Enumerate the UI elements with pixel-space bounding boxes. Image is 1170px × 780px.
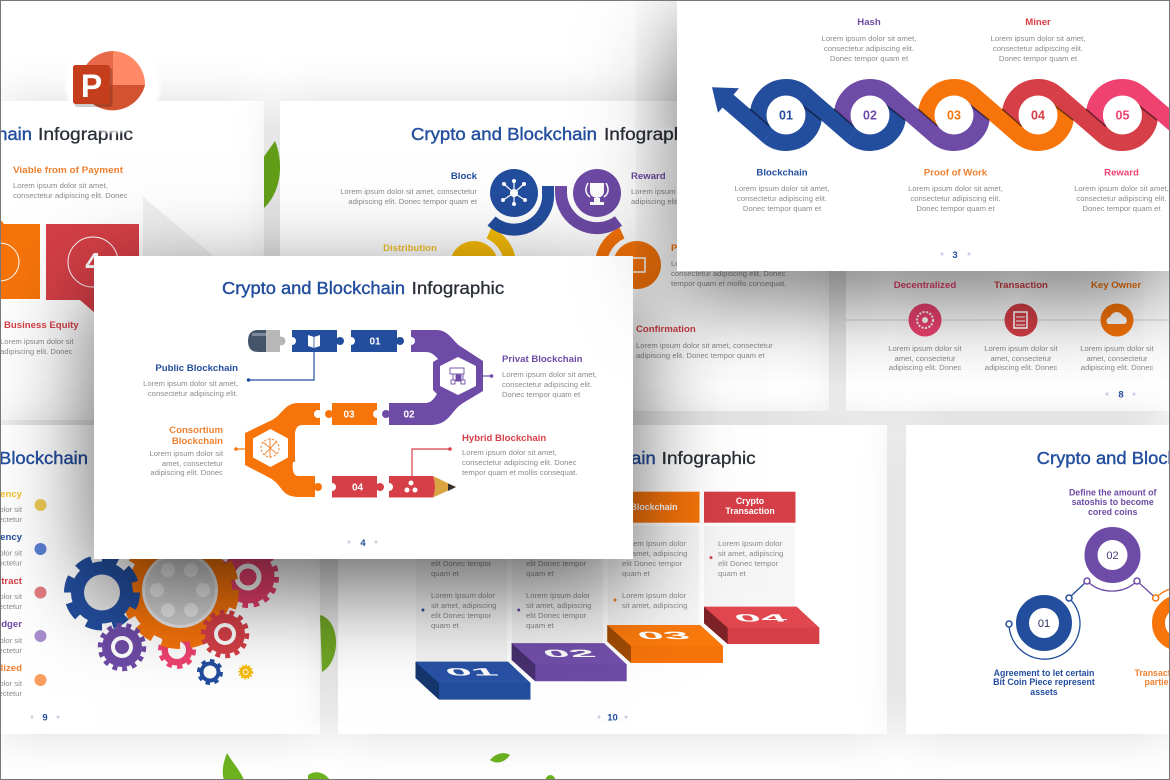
number circles: 05	[1116, 108, 1129, 122]
text block: proof of work: consectetur adipiscing elit.	[910, 194, 1001, 203]
list item: ledger	[0, 619, 46, 655]
list item: currency blue	[0, 532, 46, 568]
text block: hash: Lorem ipsum dolor sit amet,	[822, 34, 916, 43]
column 4 text: sit amet, adipiscing	[718, 549, 783, 558]
gear: red	[203, 612, 247, 656]
text block: business equity: adipiscing elit. Donec	[0, 347, 73, 356]
item: key owner: amet, consectetur	[1086, 354, 1148, 363]
puzzle piece: 04: 04	[352, 482, 363, 494]
page number	[348, 538, 378, 549]
heading	[0, 448, 187, 468]
puzzle piece: 01	[347, 330, 404, 352]
text block: proof	[671, 243, 786, 288]
column 2 text	[517, 559, 591, 630]
puzzle piece: book icon	[288, 330, 344, 352]
callout: consortium stub	[234, 447, 245, 451]
text block: proof: tempor quam et mollis consequat.	[671, 279, 786, 288]
column 1 text: sit amet, adipiscing	[431, 601, 496, 610]
heading	[222, 278, 504, 298]
text block: miner	[991, 17, 1085, 63]
column 3 text: Lorem Ipsum dolor	[622, 591, 687, 600]
page number	[30, 712, 60, 724]
puzzle piece: purple hex privat: 02	[403, 410, 415, 420]
column 1 text	[422, 559, 496, 630]
item: decentralized: Lorem ipsum dolor sit	[888, 344, 963, 353]
heading: Crypto and Blockchain	[472, 448, 656, 468]
icon: consortium network	[261, 438, 279, 458]
text block: confirmation: Lorem ipsum dolor sit amet, consectetur	[636, 341, 773, 350]
list item: currency yellow	[0, 489, 46, 524]
column 4 text: Lorem Ipsum dolor	[718, 539, 783, 548]
number circles: 03	[947, 108, 961, 122]
number circles	[766, 96, 1142, 134]
list item: contract	[0, 576, 46, 611]
text: agreement: Agreement to let certain	[994, 668, 1094, 678]
column 4 text: quam et	[718, 569, 747, 578]
page number	[940, 250, 970, 261]
text block: consortium blockchain: adipiscing elit. Donec	[150, 468, 223, 477]
gear: pink right	[220, 548, 276, 606]
text block: consortium blockchain: Blockchain	[172, 436, 223, 447]
gear: large orange	[126, 536, 234, 644]
ring chain	[489, 186, 622, 262]
item: key owner: Key Owner	[1091, 280, 1141, 291]
step 03	[607, 625, 723, 663]
item: transaction	[984, 280, 1059, 372]
text block: reward: Reward	[1104, 168, 1139, 178]
text block: reward: adipiscing elit. Donec tempor quam et	[631, 197, 760, 206]
heading	[472, 448, 756, 468]
puzzle piece: purple hex privat	[382, 330, 483, 425]
page number	[598, 712, 628, 724]
text block: hybrid blockchain: Lorem ipsum dolor sit amet,	[462, 448, 557, 457]
gear: large blue	[68, 559, 136, 626]
text block: miner: consectetur adipiscing elit.	[993, 44, 1083, 53]
step 02: 02	[540, 648, 599, 659]
text block: miner: Lorem ipsum dolor sit amet,	[991, 34, 1085, 43]
text: define amount: cored coins	[1088, 507, 1137, 517]
gear: small blue	[198, 660, 222, 684]
column 3 text	[614, 539, 687, 610]
heading	[411, 124, 698, 144]
column 2 text: quam et	[526, 569, 555, 578]
column 3 text: quam et	[622, 569, 651, 578]
tile: red 4	[46, 224, 139, 313]
item: key owner: adipiscing elit. Donec	[1081, 363, 1153, 372]
text block: privat blockchain	[502, 354, 597, 399]
column 3 text: sit amet, adipiscing	[622, 601, 687, 610]
text block: reward: Donec tempor quam et	[1082, 204, 1161, 213]
page number: 3	[952, 250, 958, 261]
text block: block	[340, 171, 478, 206]
text block: consortium blockchain: Lorem ipsum dolor sit	[150, 449, 224, 458]
text block: business equity: Business Equity	[4, 320, 79, 331]
heading: Infographic	[604, 124, 698, 144]
callout: public blockchain line	[247, 352, 314, 382]
item: decentralized: amet, consectetur	[894, 354, 956, 363]
icon: PowerPoint logo: P	[81, 68, 102, 104]
page number: 9	[42, 712, 48, 724]
ring 03	[1158, 602, 1170, 644]
puzzle piece: orange hex consortium	[245, 403, 322, 497]
ribbon arrow	[725, 87, 1170, 146]
ring 01: 01	[1038, 618, 1050, 630]
text block: proof of work: Donec tempor quam et	[916, 204, 995, 213]
pencil tip	[433, 476, 456, 498]
text block: hybrid blockchain: tempor quam et mollis consequat.	[462, 468, 577, 477]
gear: small yellow	[239, 666, 252, 678]
panel: slide with circular process	[280, 101, 829, 411]
text block: privat blockchain: Privat Blockchain	[502, 354, 583, 365]
list item: decentralized	[0, 663, 46, 698]
text block: blockchain	[735, 168, 829, 213]
step 04: 04	[731, 612, 791, 624]
text block: block: Block	[451, 171, 478, 182]
panel: slide with business equity	[0, 101, 264, 420]
text: define amount: satoshis to become	[1072, 497, 1154, 507]
panel: slide 9 gears	[0, 425, 320, 734]
item: decentralized: Decentralized	[894, 280, 956, 291]
step 01: 01	[442, 666, 501, 678]
panel: slide with numbered rings	[906, 425, 1170, 734]
column 1 text: elit Donec tempor	[431, 611, 492, 620]
panel: slide 10 steps	[338, 425, 887, 734]
text block: business equity	[0, 320, 79, 356]
page number: 10	[607, 712, 618, 724]
step 01	[416, 662, 530, 700]
arrow head	[712, 87, 739, 113]
icon: yellow circle	[450, 241, 498, 289]
page number: 8	[1118, 390, 1124, 400]
text block: blockchain: Donec tempor quam et	[743, 204, 822, 213]
column 4 header	[704, 492, 796, 523]
heading: Infographic	[662, 448, 756, 468]
number circles: 01	[779, 108, 793, 122]
icon: PowerPoint logo	[67, 51, 159, 134]
text block: privat blockchain: consectetur adipiscing elit.	[502, 380, 592, 389]
step 02	[512, 643, 627, 681]
item: decentralized: adipiscing elit. Donec	[889, 363, 961, 372]
pencil eraser	[248, 330, 286, 352]
text block: business equity: Lorem ipsum dolor sit	[0, 337, 74, 346]
heading: Crypto and Blockchain	[222, 278, 405, 298]
item: transaction: adipiscing elit. Donec	[985, 363, 1057, 372]
text block: proof of work: Lorem ipsum dolor sit amet,	[908, 184, 1003, 193]
text block: hash: Hash	[857, 17, 881, 28]
icon: network circle	[490, 169, 538, 217]
text block: privat blockchain: Donec tempor quam et	[502, 390, 581, 399]
panel: slide 4 puzzle pencil	[94, 256, 633, 559]
heading: Crypto and Blockchain	[411, 124, 597, 144]
item: key owner: Lorem ipsum dolor sit	[1080, 344, 1155, 353]
connector lines	[1006, 578, 1170, 659]
text block: consortium blockchain	[150, 425, 224, 477]
item: transaction: Lorem ipsum dolor sit	[984, 344, 1059, 353]
text block: consortium blockchain: Consortium	[169, 425, 223, 436]
column 4 header: Crypto	[736, 496, 765, 506]
panel: slide 3 ribbon	[677, 0, 1170, 271]
item: decentralized	[888, 280, 963, 372]
column 2 text: Lorem Ipsum dolor	[526, 591, 591, 600]
puzzle piece: 03	[325, 403, 381, 425]
text block: miner: Miner	[1025, 17, 1051, 28]
ring 02	[1091, 534, 1134, 576]
timeline line	[846, 319, 1170, 321]
text block: reward: Lorem ipsum dolor sit amet,	[1074, 184, 1169, 193]
column 2 text: sit amet, adipiscing	[526, 601, 591, 610]
text block: block: Lorem ipsum dolor sit amet, consectetur	[340, 187, 477, 196]
text block: privat blockchain: Lorem ipsum dolor sit amet,	[502, 370, 597, 379]
ring 01	[1022, 602, 1066, 644]
tile: red 4: 4	[85, 247, 101, 278]
label: distribution: Distribution	[383, 243, 437, 254]
page number	[1106, 390, 1136, 400]
column 1 text: Lorem Ipsum dolor	[431, 591, 496, 600]
column 4 text: elit Donec tempor	[718, 559, 779, 568]
text block: viable from of payment: consectetur adipiscing elit. Donec	[13, 191, 128, 200]
icon: orange circle	[613, 241, 661, 289]
text block: hash: Donec tempor quam et	[830, 54, 909, 63]
icon: trophy circle	[573, 169, 621, 217]
heading: Infographic	[94, 448, 187, 468]
gear: small pink	[160, 633, 194, 667]
text block: hash	[822, 17, 916, 63]
column 3 text: Lorem Ipsum dolor	[622, 539, 687, 548]
text block: reward: Lorem ipsum dolor sit amet, consectetur	[631, 187, 768, 196]
column 1 text: quam et	[431, 621, 460, 630]
callout: hybrid line	[412, 447, 452, 476]
tile: orange	[0, 219, 40, 299]
column 3 header: Blockchain	[631, 502, 677, 512]
text block: reward: consectetur adipiscing elit.	[1076, 194, 1167, 203]
gear: purple	[100, 625, 144, 669]
text block: hash: consectetur adipiscing elit.	[824, 44, 914, 53]
puzzle piece: 04	[328, 476, 384, 498]
column 1 text: elit Donec tempor	[431, 559, 492, 568]
ring 02: 02	[1106, 550, 1119, 562]
text block: proof: consectetur adipiscing elit. Donec	[671, 269, 786, 278]
step 03: 03	[634, 630, 693, 641]
text block: proof: Lorem ipsum dolor sit amet,	[671, 259, 766, 268]
text block: public blockchain: Lorem ipsum dolor sit amet,	[143, 379, 238, 388]
text: define amount	[1069, 488, 1157, 517]
number circles: 02	[863, 108, 877, 122]
text block: public blockchain: Public Blockchain	[155, 363, 238, 374]
column 3 text: sit amet, adipiscing	[622, 549, 687, 558]
text block: reward	[631, 171, 768, 206]
column 2 text: elit Donec tempor	[526, 559, 587, 568]
column 4 text	[710, 539, 783, 578]
text block: hybrid blockchain: Hybrid Blockchain	[462, 433, 546, 444]
text block: hybrid blockchain: consectetur adipiscing elit. Donec	[462, 458, 577, 467]
item: transaction: Transaction	[994, 280, 1048, 291]
text: agreement: assets	[1030, 687, 1058, 697]
text block: block: adipiscing elit. Donec tempor quam et	[348, 197, 478, 206]
text block: blockchain: consectetur adipiscing elit.	[737, 194, 827, 203]
column 3 text: elit Donec tempor	[622, 559, 683, 568]
text block: hybrid blockchain	[462, 433, 577, 477]
column 2 text: quam et	[526, 621, 555, 630]
text block: viable from of payment: Lorem ipsum dolor sit amet,	[13, 181, 108, 190]
panel: slide 8 timeline	[846, 101, 1170, 411]
puzzle piece: 01: 01	[369, 336, 381, 348]
text block: reward	[1074, 168, 1169, 213]
icon: privat network	[450, 368, 465, 384]
ribbon shadows	[750, 102, 1157, 126]
text block: proof of work	[908, 168, 1003, 213]
text block: consortium blockchain: amet, consectetur	[162, 459, 223, 468]
item: key owner	[1080, 280, 1155, 372]
text block: confirmation	[636, 324, 773, 360]
heading	[0, 124, 133, 144]
column 4 header: Transaction	[725, 506, 775, 516]
text block: blockchain: Blockchain	[756, 168, 808, 178]
number circles: 04	[1031, 108, 1045, 122]
column backgrounds	[416, 526, 795, 666]
text block: miner: Donec tempor quam et	[999, 54, 1078, 63]
text block: viable from of payment	[13, 165, 128, 200]
text block: reward: Reward	[631, 171, 666, 182]
text: transaction	[1134, 668, 1170, 687]
column 3 header	[608, 492, 700, 523]
heading: Infographic	[38, 124, 133, 144]
text block: proof of work: Proof of Work	[924, 168, 988, 178]
column 1 text: quam et	[431, 569, 460, 578]
column 2 text: elit Donec tempor	[526, 611, 587, 620]
text block: confirmation: Confirmation	[636, 324, 696, 335]
heading: Infographic	[412, 278, 504, 298]
text: agreement: Bit Coin Piece represent	[993, 677, 1095, 687]
text block: confirmation: adipiscing elit. Donec tempor quam et	[636, 351, 765, 360]
text block: viable from of payment: Viable from of Payment	[13, 165, 124, 176]
page number: 4	[360, 538, 366, 549]
text block: public blockchain: consectetur adipiscing elit.	[148, 389, 238, 398]
text block: proof: Proof	[671, 243, 697, 254]
text block: public blockchain	[143, 363, 238, 398]
text: define amount: Define the amount of	[1069, 488, 1157, 498]
text: agreement	[993, 668, 1095, 697]
puzzle piece: 03: 03	[343, 410, 355, 420]
puzzle piece: pencil body	[385, 476, 435, 498]
text block: blockchain: Lorem ipsum dolor sit amet,	[735, 184, 829, 193]
background triangle	[143, 197, 230, 270]
callout: privat stub	[483, 374, 493, 378]
step 04	[704, 607, 819, 644]
item: transaction: amet, consectetur	[990, 354, 1052, 363]
